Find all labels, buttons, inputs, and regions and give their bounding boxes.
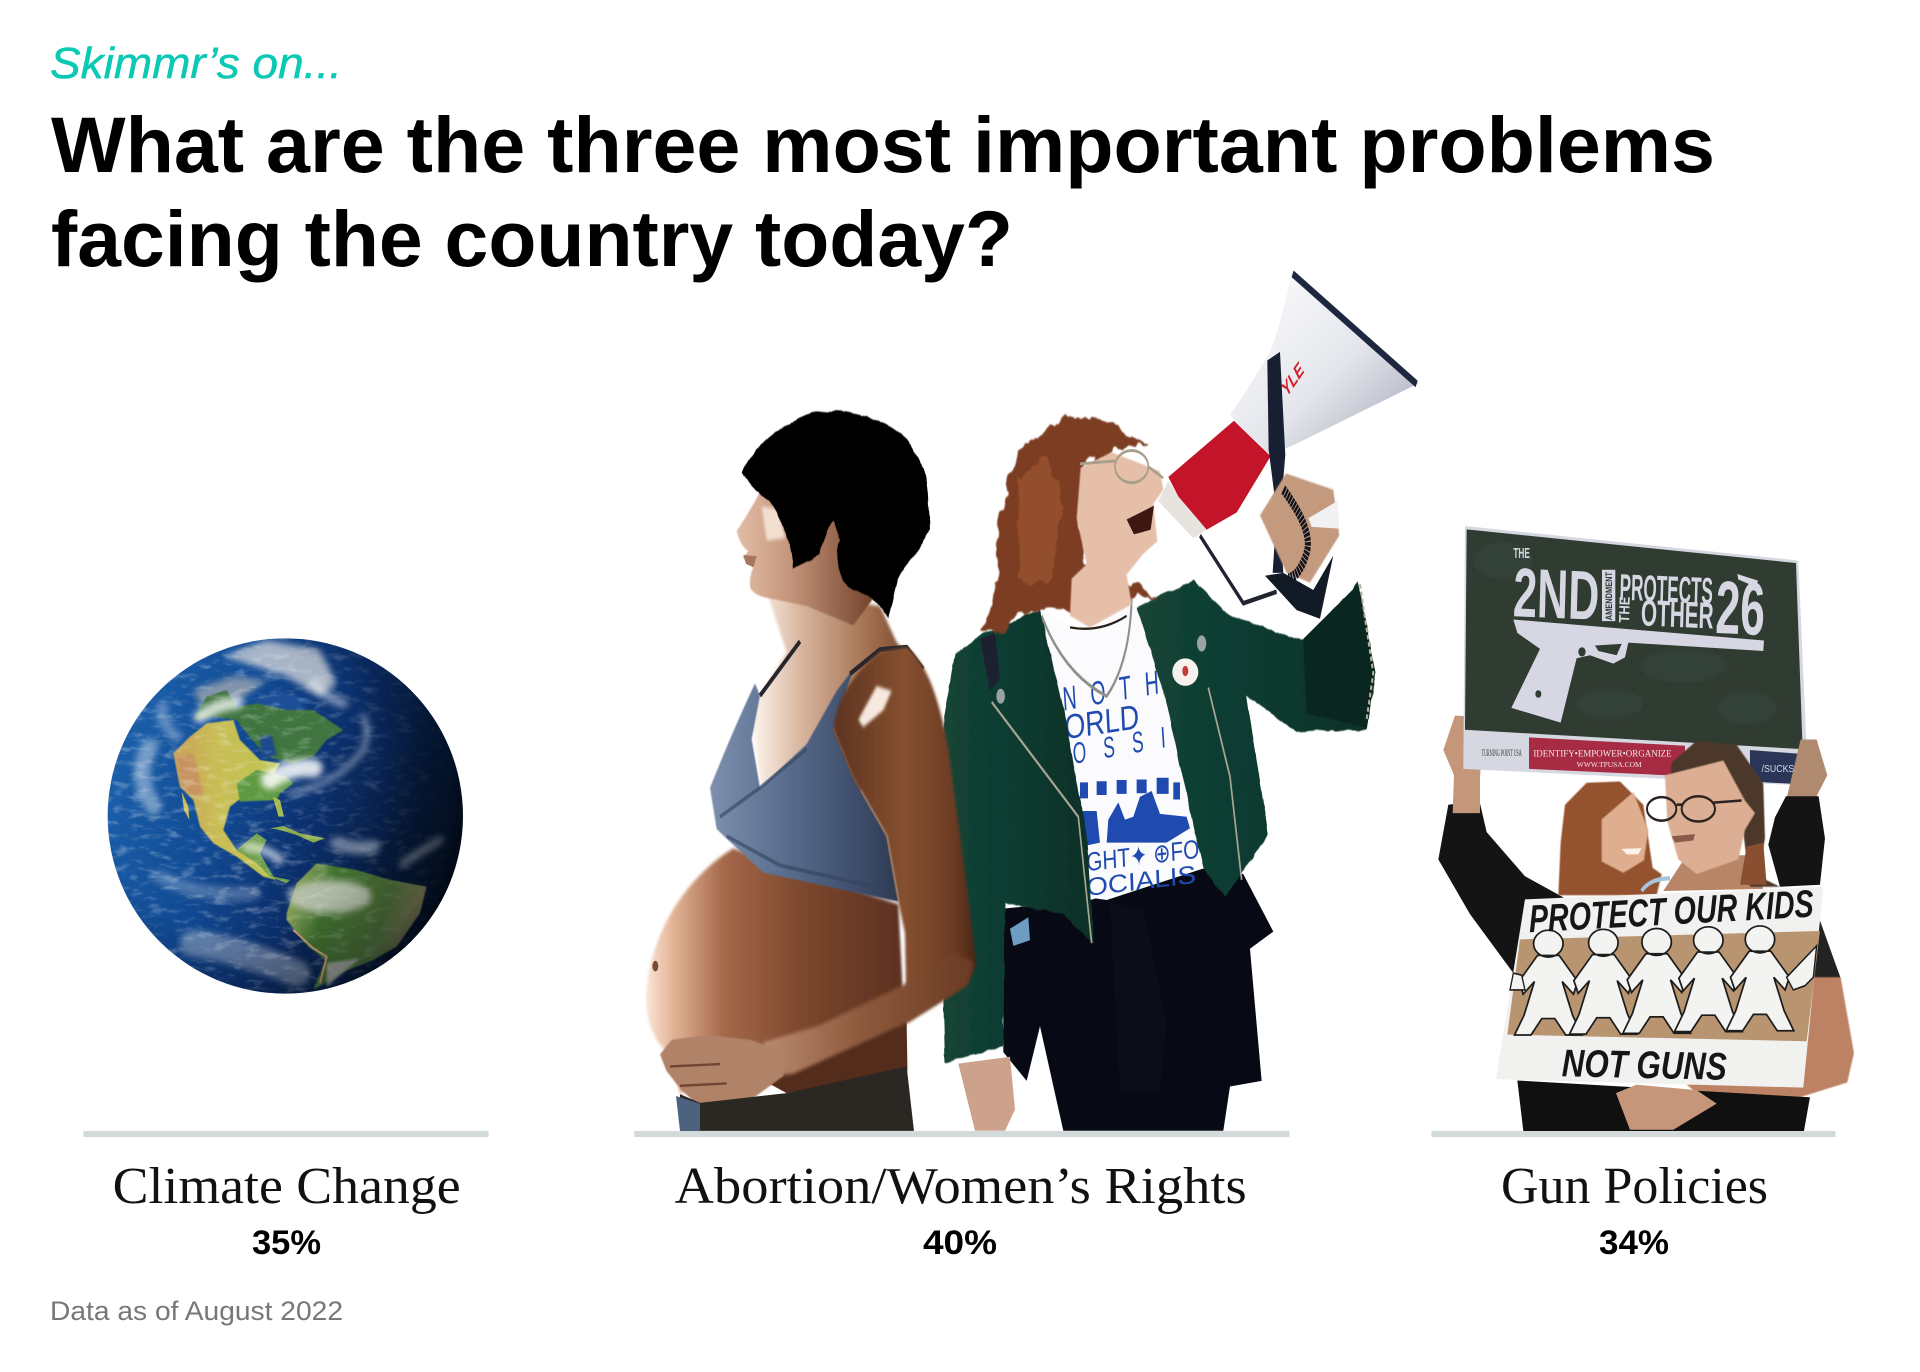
value: 34%: 34%	[1599, 1224, 1669, 1262]
pistol silhouette	[1511, 619, 1764, 723]
jacket right and sleeve	[1137, 580, 1376, 897]
sign headline: OTHER	[1640, 593, 1714, 637]
right sleeve	[1768, 796, 1825, 887]
right arm	[1687, 977, 1854, 1097]
megaphone cord	[1200, 536, 1277, 603]
paper dolls chain	[1510, 926, 1817, 1035]
face	[737, 487, 877, 625]
title	[51, 100, 1715, 283]
cuff	[1265, 556, 1333, 619]
upper arm	[833, 647, 976, 1023]
zippers	[992, 688, 1242, 943]
waistband	[680, 1066, 914, 1131]
canada green	[193, 690, 343, 763]
amazon clouds	[288, 880, 372, 913]
tee print: ORLD	[1063, 698, 1140, 747]
straps	[760, 641, 923, 696]
hand-lettered slogans: NOT GUNS	[1562, 1042, 1727, 1089]
girl on left: face	[1602, 792, 1648, 873]
sign headline: 26	[1715, 566, 1766, 652]
camouflage shading	[1473, 542, 1777, 725]
right hand	[1787, 739, 1827, 803]
megaphone strap	[1267, 352, 1285, 573]
icon: earth globe	[107, 638, 463, 995]
sign footer logo: TURNING POINT USA	[1482, 748, 1522, 758]
hand-lettered slogans: PROTECT OUR KIDS	[1528, 882, 1814, 941]
top sign frame	[1463, 526, 1808, 786]
andes	[293, 930, 327, 983]
ear	[837, 509, 860, 538]
amendment vertical label: AMENDMENT	[1605, 571, 1615, 620]
sign headline: THE	[1513, 545, 1530, 561]
clouds	[142, 683, 440, 973]
hand-lettered slogans	[1528, 882, 1814, 1089]
face	[1070, 452, 1163, 627]
megaphone rim	[1293, 274, 1417, 384]
label: climate change	[113, 1158, 461, 1262]
usa and mexico	[173, 720, 280, 880]
button badge	[1172, 658, 1198, 686]
blue item clipped to bag	[1010, 917, 1030, 946]
label: abortion / women's rights: Abortion/Women’s Rights	[675, 1158, 1247, 1215]
jacket tied at waist	[1110, 903, 1167, 1092]
caribbean	[270, 826, 325, 843]
forearm	[763, 953, 974, 1076]
central america	[237, 833, 290, 883]
lower body	[1003, 868, 1273, 1131]
girl on left: hair	[1558, 782, 1662, 895]
kicker: Skimmr's on...: Skimmr’s on...	[50, 39, 342, 88]
sign headline	[1512, 545, 1766, 652]
tee print: OCIALIS	[1086, 861, 1197, 902]
left hand and wrist	[1443, 715, 1482, 813]
cardboard sign white base	[1496, 887, 1823, 1088]
tee print: NOTH	[1061, 663, 1160, 718]
footnote: Data as of August 2022	[50, 1296, 343, 1326]
baseline bar: abortion / women's rights	[634, 1131, 1289, 1137]
shoulder highlight	[858, 686, 892, 727]
top sign green panel	[1465, 529, 1803, 749]
photo: gun rights and gun control signs	[1438, 526, 1854, 1131]
photo: protester with megaphone	[943, 271, 1418, 1131]
black tee	[1810, 920, 1841, 982]
woman on right: hair	[1670, 741, 1780, 887]
great lakes	[260, 735, 277, 758]
label: gun policies: Gun Policies	[1501, 1158, 1768, 1215]
lower hand	[1616, 1085, 1717, 1130]
coiled cable	[1283, 490, 1308, 579]
lower torso	[1517, 1080, 1810, 1131]
glasses	[1080, 451, 1163, 483]
sign headline: PROTECTS	[1619, 568, 1713, 613]
baseline bar: climate change	[83, 1131, 489, 1137]
jacket left	[943, 610, 1093, 1064]
label: gun policies	[1501, 1158, 1768, 1262]
hand on belly	[660, 1035, 787, 1108]
florida	[273, 797, 284, 817]
photo: gun rights and gun control signs: /SUCKS	[1762, 763, 1794, 774]
tee print: GHT✦ ⊕FO	[1086, 833, 1200, 877]
value: 40%: 40%	[923, 1224, 997, 1262]
baja	[182, 792, 189, 820]
value: 35%: 35%	[252, 1224, 321, 1262]
cardboard band	[1507, 931, 1820, 1041]
navel	[652, 961, 658, 971]
hair	[742, 411, 930, 618]
south america	[287, 863, 427, 990]
title: facing the country today?	[51, 194, 1013, 283]
megaphone front	[1158, 481, 1207, 538]
crop top	[710, 669, 898, 902]
glasses	[1647, 796, 1742, 822]
sign headline: 2ND	[1512, 554, 1600, 635]
lower waist shadow	[760, 1020, 907, 1093]
bag strap	[980, 633, 1000, 690]
lower hand	[958, 1057, 1015, 1131]
label: abortion / women's rights	[675, 1158, 1247, 1262]
hair	[980, 416, 1160, 633]
cloud texture	[108, 638, 426, 994]
woman on right: neck and chest	[1663, 855, 1763, 891]
tee	[1040, 604, 1203, 900]
sign footer navy band	[1750, 750, 1806, 784]
photo: pregnant woman in profile	[646, 411, 976, 1131]
neck and chest	[750, 591, 920, 797]
blue strap	[1642, 878, 1670, 891]
photo: gun rights and gun control signs: IDENTIFY•EMPOWER•ORGANIZE	[1533, 749, 1672, 759]
eastern usa green	[237, 770, 293, 802]
tee print	[1061, 663, 1200, 902]
tee print: OSSI	[1072, 722, 1167, 771]
ice and arctic clouds	[193, 640, 337, 717]
belly and torso	[646, 848, 907, 1093]
megaphone brand: YLE	[1279, 357, 1306, 402]
raised arms sweatshirt	[1438, 800, 1563, 982]
baseline bar: gun policies	[1431, 1131, 1836, 1137]
megaphone red body	[1168, 421, 1271, 530]
sign footer red band	[1529, 737, 1685, 776]
woman on right: face	[1665, 760, 1755, 874]
title: What are the three most important problems	[51, 100, 1715, 189]
megaphone horn	[1230, 271, 1418, 455]
sign headline: THE	[1616, 596, 1633, 623]
label: climate change: Climate Change	[113, 1158, 461, 1215]
photo: gun rights and gun control signs: WWW.TPUSA.COM	[1577, 761, 1642, 769]
chain necklace	[1042, 599, 1132, 696]
raised hand	[1260, 474, 1339, 583]
